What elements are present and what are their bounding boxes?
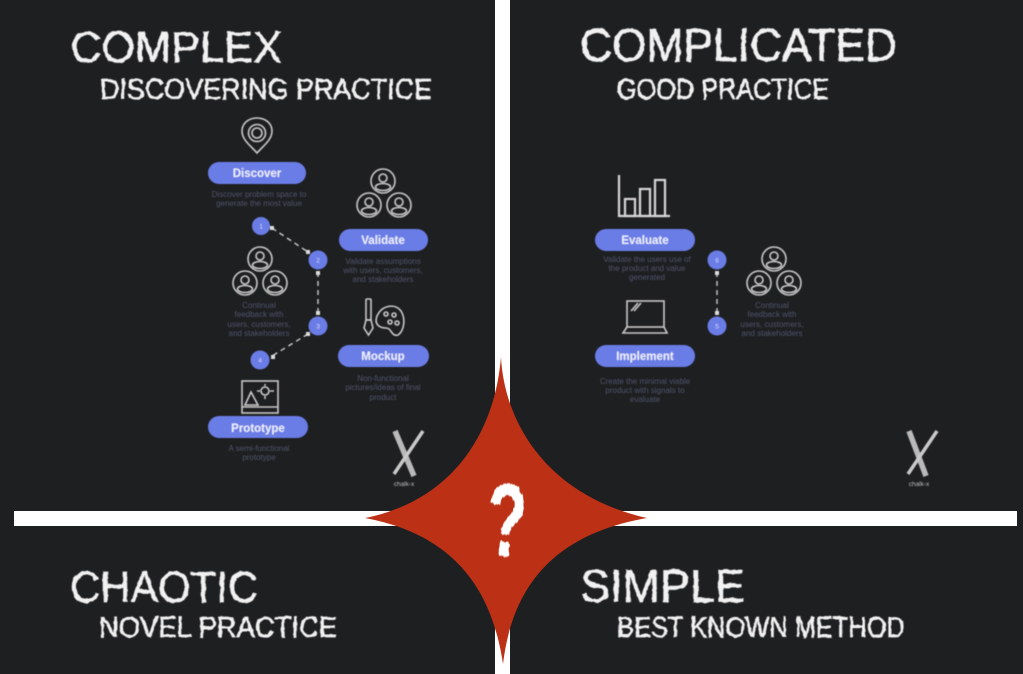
step: evaluate: Evaluate [621,235,669,247]
step: mockup: Non-functional [357,374,409,383]
icon: people group, validate [357,169,411,217]
step: prototype: prototype [242,453,276,462]
arrow: 3 to 4 [271,332,310,359]
step: validate [339,229,428,284]
text: continual feedback: users, customers, [740,320,804,329]
number badge 5: 5 [715,324,719,330]
number badge 4: 4 [258,358,262,364]
step: validate: Validate [361,235,405,247]
step: discover: Discover [233,168,282,180]
step: discover: generate the most value [216,199,302,208]
step: validate: Validate assumptions [345,257,421,266]
text: continual feedback: users, customers, [227,320,291,329]
step: mockup [338,345,429,402]
text: continual feedback: Continual [755,301,789,310]
text: continual feedback [227,301,291,338]
step: implement: evaluate [630,395,661,404]
quadrant divider: horizontal [14,511,1017,526]
logo: chalk-x right [908,431,937,488]
question mark: ? [484,461,530,582]
step: evaluate [595,229,695,282]
number badge 1 [252,217,270,235]
step: implement: Implement [616,351,674,363]
step: validate: and stakeholders [353,275,413,284]
number badge 5 [708,316,726,336]
step: implement: product with signals to [605,386,685,395]
heading: simple [580,560,905,644]
step: evaluate: Validate the users use of [603,255,692,264]
step: evaluate: the product and value [609,264,686,273]
step: prototype: A semi-functional [229,444,290,453]
icon: laptop [623,301,667,333]
red four-point star [365,357,647,664]
logo: chalk-x left: chalk-x [394,481,415,488]
icon: location pin [242,118,272,153]
heading: chaotic [70,563,337,644]
icon: bar chart [619,175,670,216]
heading: complex: DISCOVERING PRACTICE [100,74,432,106]
heading: chaotic: NOVEL PRACTICE [99,612,337,644]
heading: simple: BEST KNOWN METHOD [617,612,905,644]
arrow: 5 to 6 [715,271,719,315]
heading: simple: SIMPLE [580,560,745,612]
text: continual feedback: feedback with [235,310,283,319]
step: discover: Discover problem space to [212,190,307,199]
text: continual feedback: and stakeholders [742,329,802,338]
step: evaluate: generated [629,273,665,282]
step: validate: with users, customers, [342,266,423,275]
heading: complex: COMPLEX [70,23,282,72]
step: implement: Create the minimal viable [600,377,691,386]
step: implement [595,345,695,404]
number badge 6: 6 [715,258,719,264]
number badge 1: 1 [259,224,263,230]
number badge 6 [708,250,726,270]
logo: chalk-x right: chalk-x [909,481,930,488]
step: prototype: Prototype [231,423,285,435]
icon: people group, continual feedback [747,247,801,295]
heading: complex [70,23,432,106]
icon: prototype frame [242,381,278,413]
number badge 2 [308,250,328,270]
text: continual feedback: Continual [242,301,276,310]
number badge 2: 2 [316,258,320,264]
heading: complicated: COMPLICATED [580,19,897,71]
quadrant divider: vertical [495,0,510,674]
arrow: 2 to 3 [316,271,320,315]
step: discover [208,162,307,208]
icon: paintbrush and palette [364,299,404,335]
heading: complicated [580,19,897,106]
step: mockup: pictures/ideas of final [345,383,421,392]
icon: people group, continual feedback [233,247,287,295]
text: continual feedback: feedback with [748,310,796,319]
heading: chaotic: CHAOTIC [70,563,258,612]
number badge 4 [250,350,270,370]
number badge 3 [308,316,328,336]
heading: complicated: GOOD PRACTICE [617,74,829,106]
arrow: 1 to 2 [270,226,310,254]
number badge 3: 3 [316,324,320,330]
panel: good practice process [595,175,937,488]
logo: chalk-x left [394,431,423,488]
text: continual feedback: and stakeholders [229,329,289,338]
text: continual feedback [740,301,804,338]
step: mockup: product [370,393,397,402]
panel: discovering practice process [208,118,429,488]
step: prototype [208,416,308,462]
step: mockup: Mockup [361,351,405,363]
